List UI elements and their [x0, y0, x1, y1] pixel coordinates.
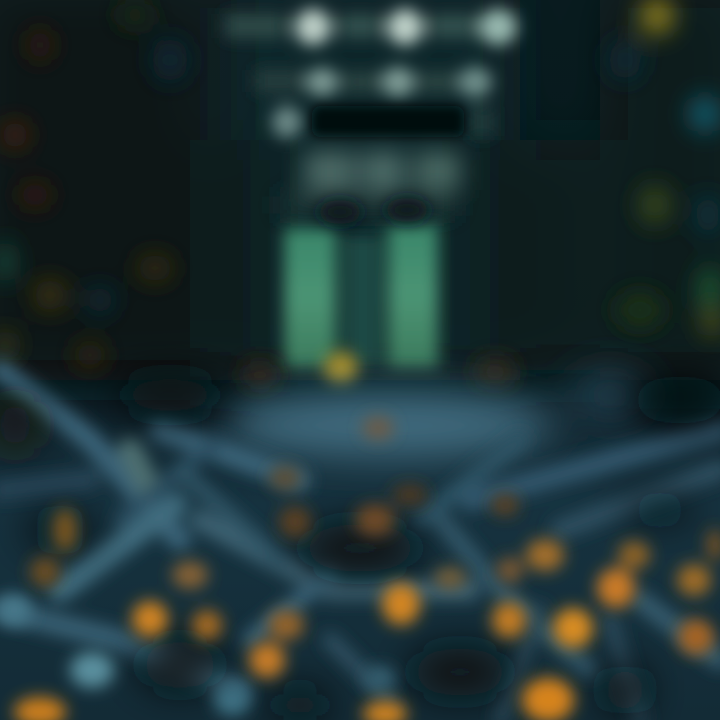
- middle tower row: [280, 152, 460, 215]
- dark gaps: [0, 376, 720, 720]
- side coloured lights: [0, 0, 720, 387]
- orange nodes: [14, 416, 720, 720]
- green panels: [284, 224, 438, 368]
- pale blue nodes: [0, 594, 396, 716]
- central platform glow: [225, 371, 650, 459]
- upper tower lights: [225, 9, 517, 138]
- left and right dark wings: [0, 0, 720, 380]
- network strands: [0, 370, 720, 720]
- yellow glow: [324, 352, 358, 384]
- dark spots above panels: [318, 198, 429, 224]
- black bar: [312, 106, 464, 137]
